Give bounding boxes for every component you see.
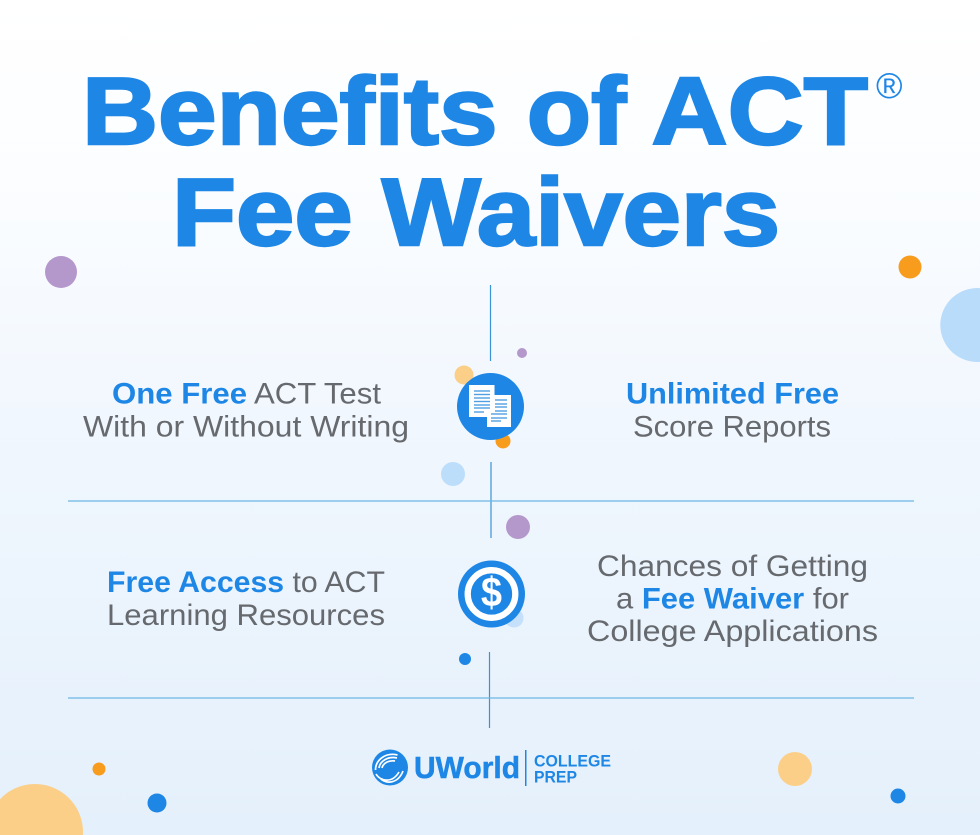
icon: documents <box>457 373 524 440</box>
icon: dollar coin: $ <box>481 568 502 616</box>
text block: college applications: College Applications <box>587 615 878 648</box>
text block: chances of getting: Chances of Getting <box>597 550 868 583</box>
text block: unlimited free: Unlimited Free <box>626 378 839 410</box>
text block: learning resources: Learning Resources <box>107 599 385 632</box>
title: Fee Waivers <box>172 159 780 266</box>
divider grid lines <box>68 285 914 728</box>
logo: UWorld College Prep: PREP <box>534 768 577 786</box>
text block: with or without writing: With or Without Writing <box>83 410 409 444</box>
logo: UWorld College Prep <box>372 750 611 786</box>
title: Benefits of ACT <box>82 58 868 165</box>
text block: score reports: Score Reports <box>633 410 831 444</box>
logo: UWorld College Prep: COLLEGE <box>534 752 611 770</box>
text block: a fee waiver for: a Fee Waiver for <box>616 582 849 616</box>
title <box>82 58 903 266</box>
title: ® <box>876 65 903 106</box>
icon: dollar coin <box>458 560 525 628</box>
text block: one free ACT test: One Free ACT Test <box>112 378 382 410</box>
decorative dots <box>0 256 980 835</box>
text block: free access: Free Access to ACT <box>107 566 385 599</box>
logo: UWorld College Prep: UWorld <box>414 750 520 785</box>
